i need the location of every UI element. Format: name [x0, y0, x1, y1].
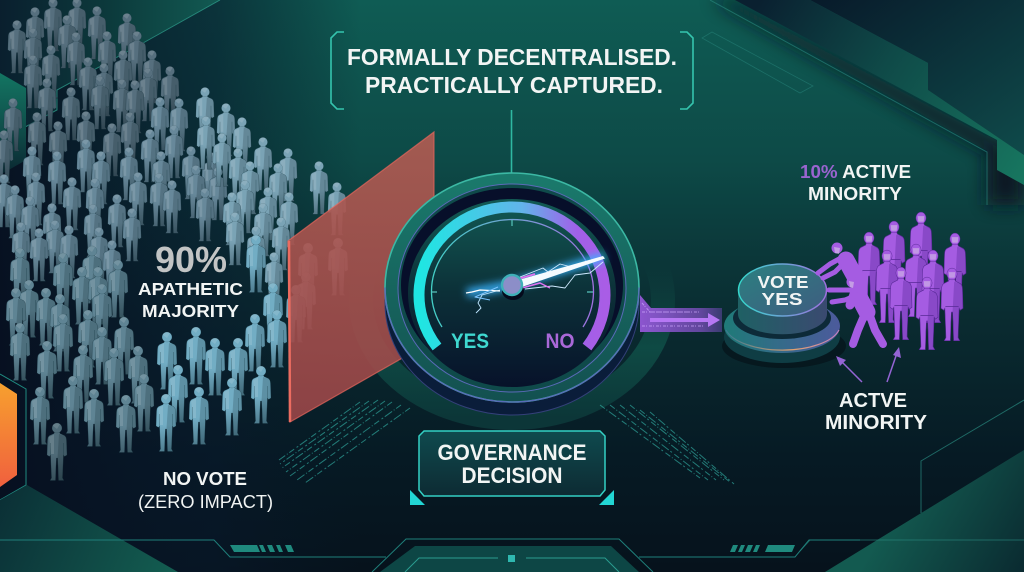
label: 90% apathetic majority: APATHETIC	[138, 279, 243, 299]
gauge rim second line	[398, 184, 626, 392]
pointer arrow left	[836, 356, 862, 382]
label: 90% apathetic majority: MAJORITY	[142, 301, 239, 321]
panel: bottom-left facet	[0, 485, 178, 572]
panel: top-left teal facet	[0, 0, 220, 140]
crowd: apathetic majority	[0, 0, 348, 481]
title: bracket right	[680, 32, 693, 109]
governance decision box: DECISION	[462, 463, 562, 488]
title: PRACTICALLY CAPTURED.	[365, 72, 663, 98]
gauge halo ring	[361, 182, 663, 418]
data streaks: left	[279, 400, 410, 483]
label: 10% active minority	[800, 161, 911, 204]
needle	[508, 256, 605, 289]
button base lower	[724, 311, 840, 363]
corner marker left	[410, 490, 425, 505]
needle glow	[467, 257, 604, 293]
lightning	[466, 258, 603, 313]
data streaks: right	[600, 405, 734, 484]
label: no vote: NO VOTE	[163, 469, 247, 489]
button base upper	[724, 299, 840, 353]
connector from title to gauge	[510, 110, 512, 175]
panel: bottom-right outline	[921, 400, 1024, 513]
button recess	[733, 297, 831, 339]
gauge rim	[385, 173, 639, 402]
gauge colored arc	[419, 207, 605, 347]
label: 10% active minority: MINORITY	[808, 183, 903, 204]
gauge ticks	[431, 220, 593, 292]
button side	[738, 290, 827, 334]
panel: bottom-right rule	[800, 540, 1024, 551]
label: no vote	[138, 469, 273, 512]
gauge rim lower line	[385, 288, 639, 402]
title: bracket left	[331, 32, 344, 109]
label: 90% apathetic majority	[138, 239, 243, 321]
corner marker right	[599, 490, 614, 505]
panel: thin parallelogram	[702, 32, 813, 93]
title	[347, 44, 677, 98]
HUD indicator bars left	[230, 545, 294, 552]
crowd group: far back	[0, 0, 179, 183]
panel: top-right dark corner	[810, 0, 1024, 155]
gauge thin arc	[432, 220, 594, 327]
label: 90% apathetic majority: 90%	[155, 239, 227, 280]
label: no vote: (ZERO IMPACT)	[138, 492, 273, 512]
flow arrow to button	[640, 295, 722, 332]
gauge drum	[385, 191, 639, 415]
crowd group: lower left	[6, 246, 154, 480]
panel: left orange tab	[0, 383, 17, 487]
panel: left teal tab	[0, 73, 26, 175]
needle hub shadow	[502, 282, 524, 300]
gauge	[385, 173, 639, 415]
label: actve minority: MINORITY	[825, 412, 928, 434]
gauge label yes: YES	[451, 330, 489, 353]
crowd group: faded behind barrier	[286, 238, 348, 342]
pushing figure back	[818, 242, 858, 305]
label: actve minority: ACTVE	[839, 390, 907, 412]
pointer arrow right	[887, 347, 901, 382]
button shadow	[722, 324, 846, 368]
barrier left edge	[289, 241, 290, 422]
barrier: translucent red wall	[288, 132, 434, 422]
gauge dark band	[401, 188, 623, 382]
panel: bottom-right facet	[825, 450, 1024, 572]
panel: top-right shadow stripe	[712, 0, 1024, 205]
governance decision box: GOVERNANCE	[438, 440, 586, 465]
panel: left shading	[0, 0, 360, 572]
label: actve minority	[825, 390, 928, 434]
crowd group: front right	[156, 235, 287, 452]
label: 10% active minority: 10% ACTIVE	[800, 161, 911, 182]
button rim accent	[726, 330, 839, 350]
governance decision box	[419, 431, 605, 496]
gauge face	[408, 199, 616, 387]
vote yes button: YES	[762, 289, 802, 309]
crowd group: middle	[0, 97, 227, 293]
crowd group: upper right	[196, 87, 346, 305]
HUD indicator bars right	[730, 545, 795, 552]
panel: top-right stripe edge line	[710, 0, 987, 205]
panel: left orange tab outline	[0, 374, 26, 500]
active minority group: standing figures	[858, 212, 966, 350]
pushing figure front	[829, 276, 883, 344]
button top	[738, 264, 826, 316]
panel: top-right teal band	[735, 0, 1024, 185]
gauge label no: NO	[546, 330, 574, 353]
vote yes button	[722, 264, 846, 368]
panel: top-left facet edge line	[25, 0, 220, 160]
title: FORMALLY DECENTRALISED.	[347, 44, 677, 70]
button label: VOTE	[758, 272, 808, 292]
needle hub	[502, 275, 522, 295]
bottom HUD frame	[0, 539, 860, 572]
